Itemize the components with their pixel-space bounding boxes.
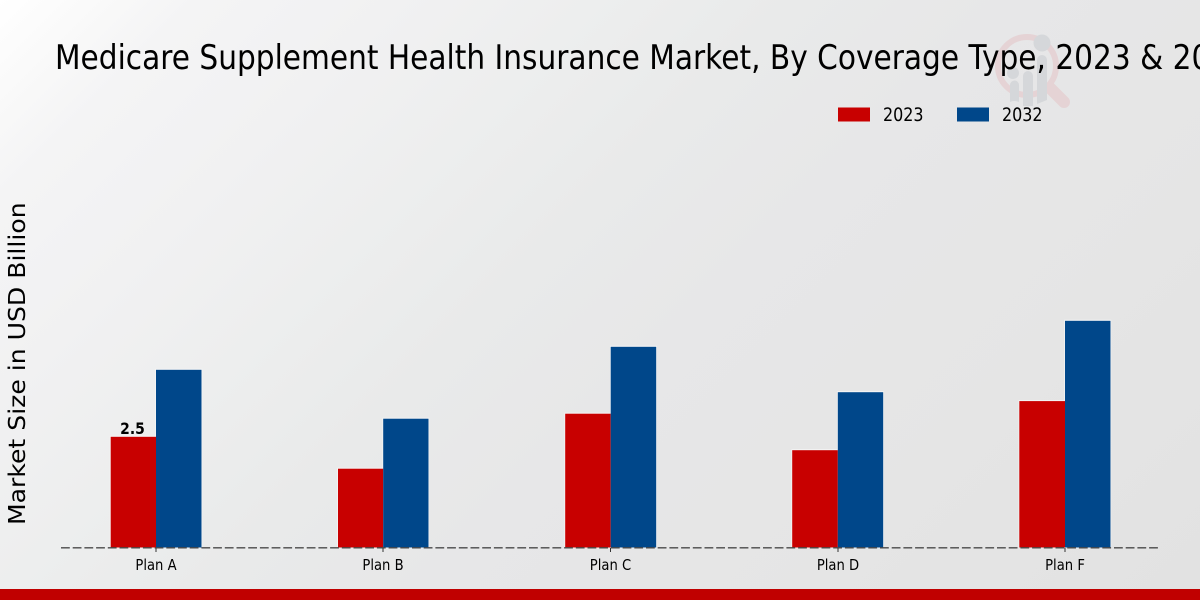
x axis ticks <box>156 548 1065 552</box>
value label: 2.5 <box>120 419 145 438</box>
x axis tick labels: Plan C <box>590 557 631 574</box>
group: Plan A <box>110 370 202 548</box>
group: Plan B <box>338 418 428 548</box>
group: Plan D <box>792 392 883 548</box>
legend: 2032 <box>957 105 1043 126</box>
baseline <box>61 547 1160 549</box>
group: Plan C <box>565 346 656 548</box>
watermark logo <box>998 34 1064 106</box>
y axis label: Market Size in USD Billion <box>4 202 31 525</box>
group: Plan F <box>1019 320 1110 548</box>
bar chart <box>110 320 1110 548</box>
footer bar <box>0 589 1200 600</box>
x axis tick labels: Plan F <box>1045 557 1085 574</box>
x axis tick labels: Plan D <box>817 557 859 574</box>
legend: 2023 <box>838 105 924 126</box>
legend: 2032: 2032 <box>1002 105 1043 126</box>
legend: 2023: 2023 <box>883 105 924 126</box>
x axis tick labels: Plan A <box>135 557 177 574</box>
x axis tick labels: Plan B <box>362 557 404 574</box>
legend <box>838 105 1043 126</box>
x axis tick labels <box>135 557 1085 574</box>
